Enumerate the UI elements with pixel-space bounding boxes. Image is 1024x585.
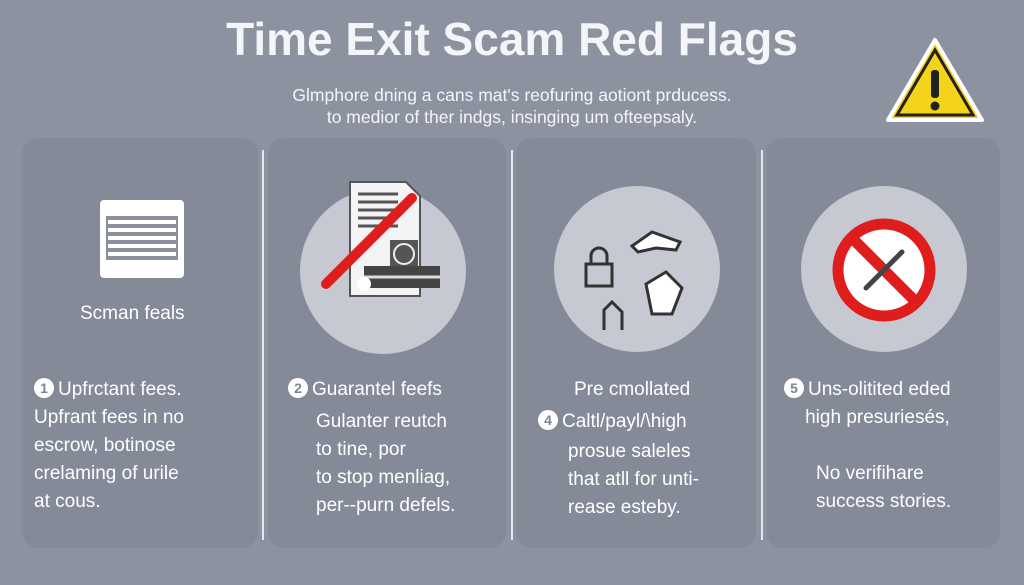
text: escrow, botinose	[34, 435, 176, 456]
text: at cous.	[34, 491, 101, 512]
panel: 3: rease esteby.	[568, 497, 681, 518]
subtitle: Glmphore dning a cans mat's reofuring aotiont prducess.	[292, 85, 732, 105]
heading: Pre cmollated	[574, 379, 690, 400]
panel: 3: prosue saleles	[568, 441, 691, 462]
subtitle	[292, 85, 732, 127]
icon: warning	[886, 38, 984, 122]
icon: document window	[100, 200, 184, 278]
text	[784, 378, 951, 428]
text: Uns-olitited eded	[808, 379, 951, 400]
text: 4	[544, 412, 552, 428]
panel: 3	[516, 138, 756, 548]
panel: 1	[22, 138, 258, 548]
text: 5	[790, 380, 798, 396]
panel: 4: No verifihare	[816, 463, 924, 484]
heading: Scman feals	[80, 303, 185, 324]
text: high presuriesés,	[805, 407, 950, 428]
panel: 4: success stories.	[816, 491, 951, 512]
panel: 4	[766, 138, 1000, 548]
icon: lock and tools	[554, 186, 720, 352]
panel: 2: per--purn defels.	[316, 495, 455, 516]
icon: prohibited	[801, 186, 967, 352]
panel: 3: that atll for unti-	[568, 469, 699, 490]
text: crelaming of urile	[34, 463, 179, 484]
text: 2	[294, 380, 302, 396]
panel: 2	[268, 138, 506, 548]
text: Caltl/payl/\high	[562, 411, 687, 432]
panel: 2: Gulanter reutch	[316, 411, 447, 432]
panel: 2: to tine, por	[316, 439, 406, 460]
text: Upfrctant fees.	[58, 379, 182, 400]
text: Upfrant fees in no	[34, 407, 184, 428]
text	[34, 378, 184, 512]
subtitle: to medior of ther indgs, insinging um ofteepsaly.	[327, 107, 697, 127]
title: Time Exit Scam Red Flags	[226, 13, 798, 65]
text: Guarantel feefs	[312, 379, 442, 400]
panel: 2: to stop menliag,	[316, 467, 450, 488]
icon: crossed document	[300, 188, 466, 354]
text: 1	[40, 380, 48, 396]
